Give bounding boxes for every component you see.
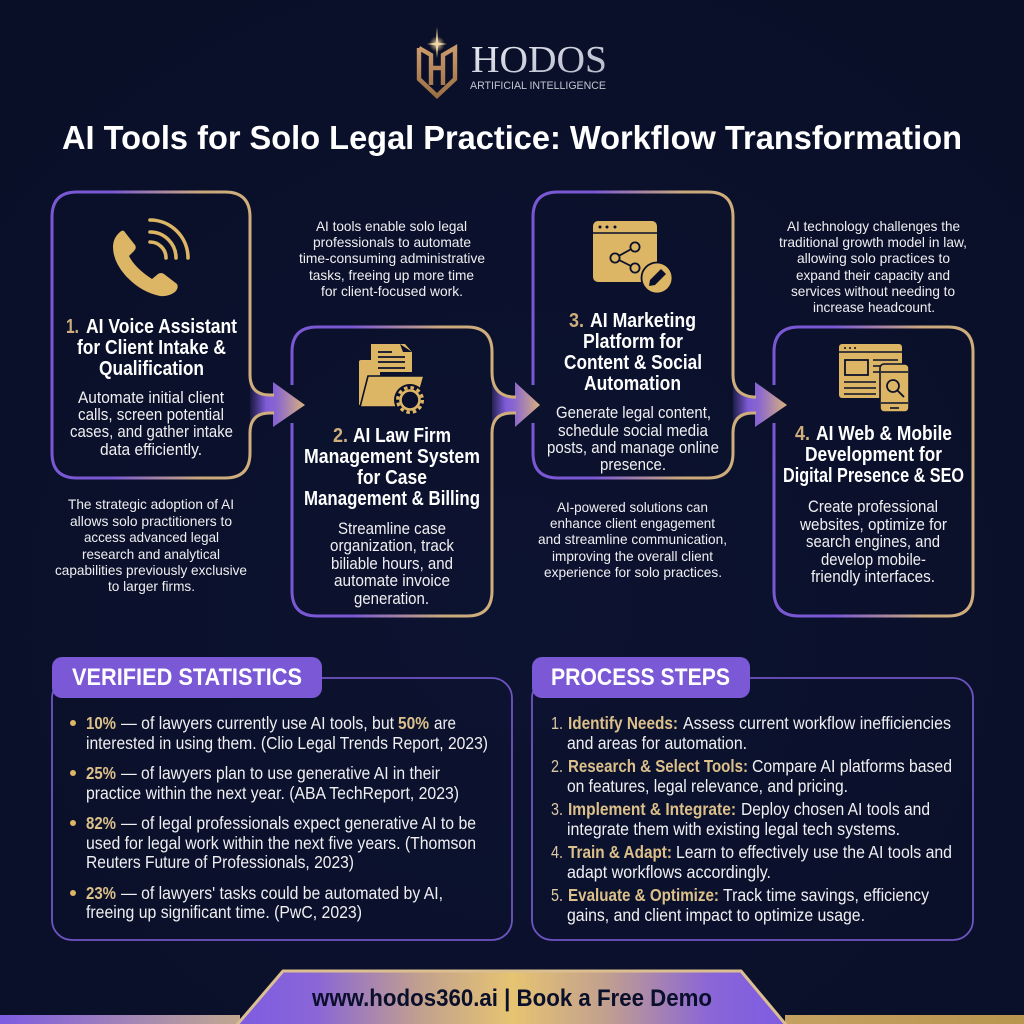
heading: verified statistics tab: VERIFIED STATISTICS <box>72 664 302 691</box>
panel: step 4 AI Web and Mobile Development <box>774 327 973 616</box>
brand tagline: ARTIFICIAL INTELLIGENCE <box>470 80 606 92</box>
text: note on strategic adoption: capabilities previously exclusive <box>55 562 247 578</box>
heading: step 4: Digital Presence & SEO <box>783 465 964 487</box>
heading: step 3: Content & Social <box>564 352 702 374</box>
panel: step 3 AI Marketing Platform <box>533 192 756 478</box>
heading: step 2: AI Law Firm <box>353 425 451 447</box>
text: note on automating administrative tasks <box>299 218 485 299</box>
heading: step 3 <box>564 310 702 395</box>
icon: folder with document and gear <box>359 344 426 416</box>
statistic: 23 percent: 23% <box>86 883 116 903</box>
text: note on client engagement: experience for solo practices. <box>544 564 722 580</box>
step: train and adapt: 4. <box>551 842 563 862</box>
heading: step 1: AI Voice Assistant <box>86 316 237 338</box>
step: identify needs: and areas for automation. <box>567 733 747 753</box>
heading: step 3: Automation <box>584 373 681 395</box>
text: step 2 description: automate invoice <box>334 571 450 590</box>
step: implement and integrate: Implement & Integrate: <box>568 799 736 819</box>
text: step 2 description: generation. <box>354 589 429 608</box>
text: step 3 description: posts, and manage online <box>547 438 719 457</box>
statistic: 23 percent: — of lawyers' tasks could be automated by AI, <box>121 883 443 903</box>
heading: verified statistics tab <box>52 657 322 698</box>
heading: step 1 <box>66 316 237 380</box>
heading: step 3: AI Marketing <box>590 310 696 332</box>
text: step 3 description: Generate legal content, <box>556 403 711 422</box>
step: implement and integrate: 3. <box>551 799 563 819</box>
heading: step 2: for Case <box>357 467 427 489</box>
text: step 2 description: organization, track <box>330 536 455 555</box>
statistic: 82 percent: used for legal work within the next five years. (Thomson <box>86 833 476 853</box>
text: step 1 description: calls, screen potential <box>78 405 224 424</box>
text: note on client engagement: AI-powered solutions can <box>557 499 708 515</box>
text: step 4 description: search engines, and <box>806 532 940 551</box>
heading: step 4: Development for <box>805 444 942 466</box>
heading: step 1: Qualification <box>99 358 204 380</box>
statistic: 10 percent: 50% <box>398 713 429 733</box>
text: step 2 description: Streamline case <box>338 519 446 538</box>
text: note on automating administrative tasks: for client-focused work. <box>321 283 463 299</box>
step: evaluate and optimize: gains, and client impact to optimize usage. <box>567 905 865 925</box>
statistic: 10 percent: are <box>434 713 456 733</box>
text: step 4 description: Create professional <box>808 497 938 516</box>
text: step 1 description <box>70 388 233 459</box>
text: note on the traditional growth model: AI technology challenges the <box>787 218 960 234</box>
statistic: 25 percent <box>70 763 459 803</box>
arrow: step 2 to step 3 <box>492 372 540 433</box>
step: implement and integrate: Deploy chosen AI tools and <box>741 799 930 819</box>
step: evaluate and optimize: 5. <box>551 885 563 905</box>
statistic: 25 percent: practice within the next year. (ABA TechReport, 2023) <box>86 783 459 803</box>
heading: step 3: 3. <box>569 310 584 332</box>
step: implement and integrate: integrate them with existing legal tech systems. <box>567 819 900 839</box>
text: note on strategic adoption: research and analytical <box>82 546 220 562</box>
logo: Hodos Artificial Intelligence <box>419 27 607 96</box>
heading: step 4 <box>783 423 964 487</box>
text: note on automating administrative tasks: professionals to automate <box>313 234 471 250</box>
heading: step 1: 1. <box>66 316 79 338</box>
text: note on the traditional growth model: increase headcount. <box>813 299 935 315</box>
text: note on automating administrative tasks: time-consuming administrative <box>299 250 485 266</box>
icon: shield monogram <box>419 27 455 96</box>
text: step 4 description: friendly interfaces. <box>811 567 935 586</box>
step: implement and integrate <box>551 799 930 839</box>
statistic: 25 percent: — of lawyers plan to use generative AI in their <box>121 763 440 783</box>
text: note on strategic adoption: The strategic adoption of AI <box>68 496 234 512</box>
step: evaluate and optimize: Track time savings, efficiency <box>723 885 929 905</box>
icon: browser window with share symbol and pencil <box>593 221 672 294</box>
heading: step 2: Management & Billing <box>304 488 480 510</box>
panel: process steps <box>532 657 973 940</box>
text: note on the traditional growth model: traditional growth model in law, <box>779 234 967 250</box>
text: step 3 description: presence. <box>600 455 666 474</box>
heading: step 2 <box>304 425 480 510</box>
text: step 4 description: develop mobile- <box>821 550 926 569</box>
text: step 3 description: schedule social media <box>558 421 709 440</box>
step: train and adapt: adapt workflows accordingly. <box>567 862 771 882</box>
text: note on strategic adoption <box>55 496 247 594</box>
text: note on client engagement: and streamline communication, <box>538 531 727 547</box>
text: step 2 description <box>330 519 455 608</box>
footer banner with call to action <box>0 971 1024 1024</box>
statistic: 25 percent: 25% <box>86 763 116 783</box>
text: step 1 description: Automate initial client <box>78 388 224 407</box>
text: step 3 description <box>547 403 719 474</box>
step: evaluate and optimize <box>551 885 929 925</box>
call to action text: www.hodos360.ai | Book a Free Demo <box>311 985 712 1012</box>
title: AI Tools for Solo Legal Practice: Workflow Transformation <box>62 119 962 156</box>
text: note on client engagement: improving the overall client <box>552 548 713 564</box>
text: note on automating administrative tasks: AI tools enable solo legal <box>316 218 467 234</box>
step: research and select tools: Research & Select Tools: <box>568 756 748 776</box>
heading: step 4: AI Web & Mobile <box>816 423 952 445</box>
heading: step 2: Management System <box>304 446 480 468</box>
text: step 4 description <box>799 497 947 586</box>
text: note on client engagement: enhance client engagement <box>550 515 715 531</box>
text: note on strategic adoption: to larger firms. <box>108 578 195 594</box>
arrow: step 1 to step 2 <box>250 375 305 433</box>
heading: process steps tab <box>532 657 750 698</box>
step: identify needs: 1. <box>551 713 563 733</box>
heading: step 3: Platform for <box>583 331 683 353</box>
step: identify needs: Assess current workflow inefficiencies <box>683 713 951 733</box>
text: step 4 description: websites, optimize for <box>799 515 947 534</box>
heading: process steps tab: PROCESS STEPS <box>551 664 730 691</box>
statistic: 82 percent <box>70 813 476 872</box>
step: research and select tools <box>551 756 952 796</box>
step: research and select tools: on features, legal relevance, and pricing. <box>567 776 848 796</box>
statistic: 23 percent <box>70 883 443 922</box>
step: train and adapt: Train & Adapt: <box>568 842 672 862</box>
text: note on the traditional growth model: services without needing to <box>791 283 955 299</box>
statistic: 23 percent: freeing up significant time. (PwC, 2023) <box>86 902 362 922</box>
statistic: 10 percent: interested in using them. (Clio Legal Trends Report, 2023) <box>86 733 488 753</box>
brand name: HODOS <box>471 39 607 81</box>
step: train and adapt <box>551 842 952 882</box>
statistic: 82 percent: — of legal professionals expect generative AI to be <box>121 813 476 833</box>
statistic: 10 percent: — of lawyers currently use AI tools, but <box>121 713 394 733</box>
heading: step 2: 2. <box>333 425 348 447</box>
text: note on client engagement <box>538 499 727 580</box>
text: note on strategic adoption: allows solo practitioners to <box>70 513 232 529</box>
text: note on strategic adoption: access advanced legal <box>84 529 219 545</box>
icon: phone with signal waves <box>113 220 188 296</box>
heading: step 4: 4. <box>795 423 810 445</box>
arrow: step 3 to step 4 <box>733 375 787 433</box>
text: step 2 description: biliable hours, and <box>331 554 453 573</box>
icon: web page and mobile phone with magnifier <box>839 344 909 412</box>
step: identify needs: Identify Needs: <box>568 713 678 733</box>
step: evaluate and optimize: Evaluate & Optimize: <box>568 885 719 905</box>
text: note on automating administrative tasks: tasks, freeing up more time <box>309 267 474 283</box>
text: step 1 description: data efficiently. <box>100 440 202 459</box>
panel: step 2 AI Law Firm Management <box>292 327 516 616</box>
statistic: 82 percent: 82% <box>86 813 116 833</box>
statistic: 10 percent: 10% <box>86 713 116 733</box>
step: train and adapt: Learn to effectively use the AI tools and <box>676 842 952 862</box>
step: research and select tools: Compare AI platforms based <box>752 756 952 776</box>
statistic: 82 percent: Reuters Future of Professionals, 2023) <box>86 852 354 872</box>
text: note on the traditional growth model: allowing solo practices to <box>797 250 950 266</box>
step: research and select tools: 2. <box>551 756 563 776</box>
panel: step 1 AI Voice Assistant <box>52 192 274 478</box>
heading: step 1: for Client Intake & <box>77 337 226 359</box>
text: note on the traditional growth model <box>779 218 967 315</box>
panel: verified statistics <box>52 657 512 940</box>
text: note on the traditional growth model: expand their capacity and <box>796 267 950 283</box>
text: step 1 description: cases, and gather intake <box>70 422 233 441</box>
statistic: 10 percent <box>70 713 488 753</box>
step: identify needs <box>551 713 951 753</box>
